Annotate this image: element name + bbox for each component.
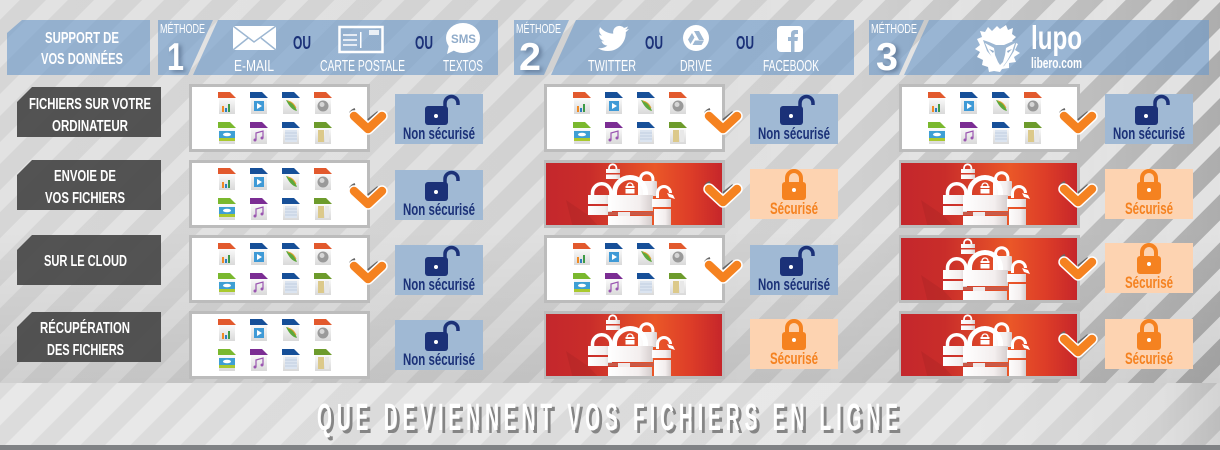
row 4 method 3: badge	[1105, 319, 1193, 369]
row label: envoie de vos fichiers: ENVOIE DE	[54, 168, 116, 185]
row 2 method 2: locks	[544, 160, 725, 232]
icon: envelope	[233, 26, 276, 50]
row 2 method 1: badge: Non sécurisé	[403, 200, 475, 219]
row label: sur le cloud	[17, 235, 161, 285]
row 4 method 2: locks	[544, 311, 725, 383]
row 3 method 3: check	[1060, 255, 1092, 275]
row 1 method 2: badge	[750, 94, 838, 144]
row label: récupération des fichiers: DES FICHIERS	[47, 342, 124, 359]
panel: méthode 1	[158, 20, 498, 79]
logo: lupo libero wolf: libero.com	[1031, 55, 1082, 72]
row 2 method 3: check	[1060, 182, 1092, 202]
row 2 method 2: check	[705, 182, 737, 202]
panel: méthode 1: CARTE POSTALE	[320, 58, 405, 75]
row 2 method 3: badge: Sécurisé	[1125, 199, 1173, 218]
panel: méthode 1: MÉTHODE	[160, 21, 205, 36]
icon: SMS bubble: SMS	[451, 32, 476, 46]
row 4 method 2: badge	[750, 319, 838, 369]
panel: méthode 3	[869, 19, 1209, 79]
row 1 method 1: badge: Non sécurisé	[403, 124, 475, 143]
row 1 method 2: check	[705, 109, 737, 129]
row 2 method 2: badge	[750, 169, 838, 219]
icon: SMS bubble	[446, 23, 480, 54]
row 3 method 2: check	[705, 258, 737, 278]
panel: méthode 1: 1	[167, 36, 184, 79]
row 4 method 3: locks	[899, 311, 1080, 383]
heading: support de vos données	[7, 20, 150, 75]
panel: méthode 3: MÉTHODE	[871, 21, 917, 36]
title	[317, 397, 906, 442]
panel: méthode 1: OU	[415, 33, 433, 53]
row 4 method 2: badge: Sécurisé	[770, 349, 818, 368]
panel: méthode 2: OU	[736, 33, 754, 53]
row 4 method 1: badge	[395, 320, 483, 370]
panel: méthode 1: OU	[293, 33, 311, 53]
row 4 method 1: files	[189, 311, 370, 379]
row 1 method 1: check	[350, 109, 382, 129]
row label: sur le cloud: SUR LE CLOUD	[44, 253, 127, 270]
panel: méthode 2: MÉTHODE	[516, 21, 561, 36]
row 3 method 3: badge	[1105, 243, 1193, 293]
heading: support de vos données: SUPPORT DE	[45, 30, 119, 47]
panel: méthode 2: DRIVE	[680, 58, 712, 75]
row 3 method 3: locks	[899, 235, 1080, 307]
panel: méthode 2	[514, 20, 854, 79]
row 1 method 1: files	[189, 84, 370, 152]
panel: méthode 2: TWITTER	[588, 58, 636, 75]
logo: lupo libero wolf	[975, 19, 1082, 72]
row 4 method 3: badge: Sécurisé	[1125, 349, 1173, 368]
icon: twitter bird	[598, 26, 629, 51]
row 3 method 2: badge: Non sécurisé	[758, 275, 830, 294]
row 4 method 3: check	[1060, 332, 1092, 352]
panel: méthode 1: TEXTOS	[443, 58, 483, 75]
panel: méthode 2: FACEBOOK	[763, 58, 819, 75]
row label: fichiers sur votre ordinateur: ORDINATEUR	[52, 118, 128, 135]
row label: récupération des fichiers: RÉCUPÉRATION	[40, 318, 130, 337]
row 2 method 1: check	[350, 184, 382, 204]
row 3 method 3: badge: Sécurisé	[1125, 273, 1173, 292]
row 1 method 3: badge: Non sécurisé	[1113, 124, 1185, 143]
row label: envoie de vos fichiers	[17, 160, 161, 210]
row 1 method 3: check	[1060, 109, 1092, 129]
icon: postcard	[340, 27, 382, 52]
heading: support de vos données: VOS DONNÉES	[41, 49, 123, 68]
row label: fichiers sur votre ordinateur: FICHIERS SUR VOTRE	[29, 96, 151, 113]
row 1 method 2: badge: Non sécurisé	[758, 124, 830, 143]
icon: facebook	[777, 26, 803, 52]
row 2 method 1: files	[189, 160, 370, 228]
row 2 method 2: badge: Sécurisé	[770, 199, 818, 218]
row label: envoie de vos fichiers: VOS FICHIERS	[45, 190, 125, 207]
bottom band	[0, 383, 1220, 450]
row 2 method 3: badge	[1105, 169, 1193, 219]
logo: lupo libero wolf: lupo	[1031, 19, 1082, 56]
panel: méthode 3: 3	[876, 36, 898, 79]
row 1 method 3: badge	[1105, 94, 1193, 144]
row 3 method 1: badge: Non sécurisé	[403, 275, 475, 294]
row 3 method 1: files	[189, 235, 370, 303]
row 3 method 1: badge	[395, 245, 483, 295]
row label: récupération des fichiers	[17, 312, 161, 362]
row 3 method 2: badge	[750, 245, 838, 295]
panel: méthode 1: E-MAIL	[234, 58, 274, 75]
panel: méthode 2: OU	[645, 33, 663, 53]
row label: fichiers sur votre ordinateur	[17, 87, 161, 137]
row 2 method 1: badge	[395, 170, 483, 220]
panel: méthode 2: 2	[519, 36, 541, 79]
row 2 method 3: locks	[899, 160, 1080, 232]
row 1 method 1: badge	[395, 94, 483, 144]
row 3 method 2: files	[544, 235, 725, 303]
row 1 method 2: files	[544, 84, 725, 152]
row 4 method 1: badge: Non sécurisé	[403, 350, 475, 369]
icon: drive	[683, 25, 709, 51]
row 1 method 3: files	[899, 84, 1080, 152]
row 3 method 1: check	[350, 259, 382, 279]
